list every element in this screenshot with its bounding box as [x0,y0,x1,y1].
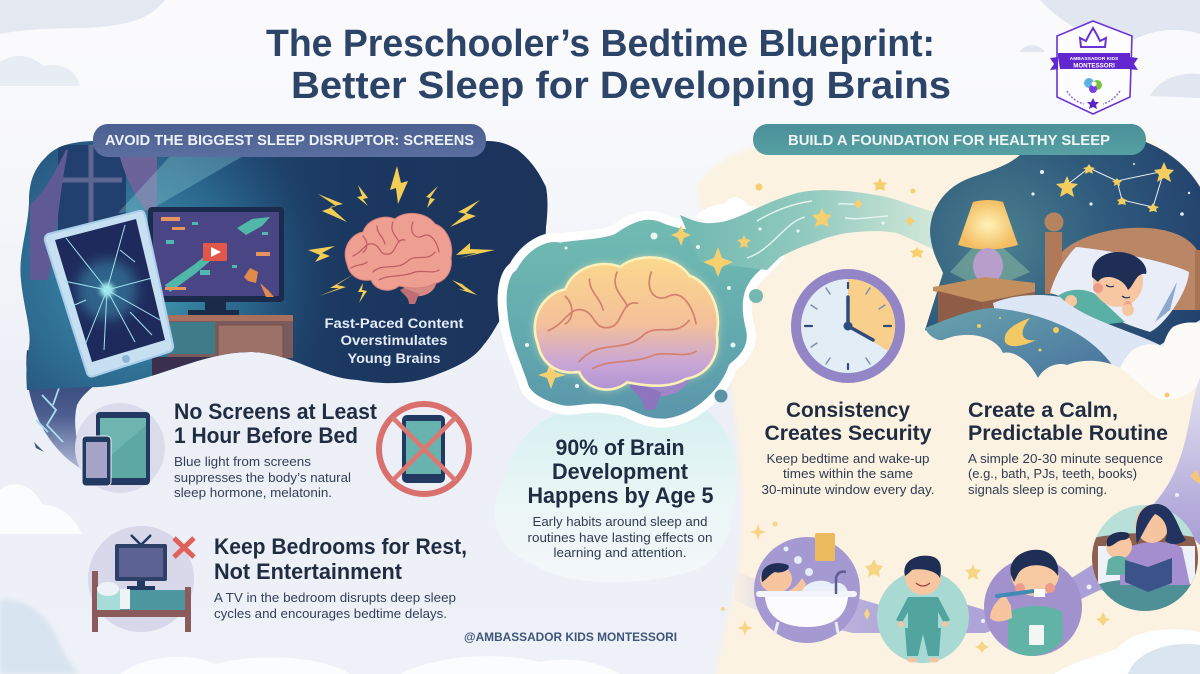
icon: bath [754,533,860,643]
title [266,23,951,107]
routine body: (e.g., bath, PJs, teeth, books) [968,467,1137,481]
screen glow [20,141,303,390]
pale text cloud [495,401,736,582]
icon: bedtime reading [1092,504,1200,615]
stat heading [528,435,714,508]
logo name: MONTESSORI [1073,62,1115,70]
stat heading: Development [552,459,688,484]
routine body [968,452,1163,497]
consistency heading: Consistency [786,398,910,422]
side lavender swirl [1148,378,1200,545]
corner clouds [1054,629,1200,674]
stat heading: 90% of Brain [556,435,684,460]
no screens heading: 1 Hour Before Bed [174,423,358,448]
consistency body: times within the same [783,467,913,481]
block: consistency [762,269,934,497]
white cloud [1120,322,1200,400]
bedroom scene clipped to panel [20,141,303,390]
icon: cracked tablet [45,211,173,377]
bed [925,212,1200,380]
logo name: AMBASSADOR KIDS [1070,56,1119,62]
light beam [118,155,245,213]
logo badge [1050,21,1138,114]
icon: glowing brain [535,257,718,410]
caption: fast-paced content: Fast-Paced Content [324,316,464,331]
decorative stars [721,522,1110,653]
icon: sleeping boy [1058,252,1146,325]
consistency body [762,452,934,497]
window and curtains [30,145,157,280]
bedrooms heading: Keep Bedrooms for Rest, [214,534,467,559]
panel: center brain [495,178,940,582]
no screens heading [174,399,378,448]
icon: overstimulated brain [345,213,452,304]
caption: fast-paced content [324,316,464,366]
icon: pajamas child [877,556,969,663]
bedrooms body: cycles and encourages bedtime delays. [214,607,447,621]
dark panel shape [20,141,548,390]
icon: phone and tablet [75,403,165,493]
attribution handle: @AMBASSADOR KIDS MONTESSORI [464,632,677,644]
desk [152,315,293,376]
heading pill: avoid screens: AVOID THE BIGGEST SLEEP DISRUPTOR: SCREENS [105,133,474,149]
lamp on nightstand [933,200,1035,324]
routine heading: Predictable Routine [968,421,1168,445]
icon: clock [791,269,905,383]
ribbon [1050,53,1138,70]
bedrooms heading [214,534,467,584]
pillow [1050,247,1189,332]
flowing stream [680,190,940,270]
routine strip [721,378,1200,663]
stat body [528,515,713,560]
tail fade with cracks [26,350,100,470]
consistency heading: Creates Security [764,421,932,445]
purple ribbon [735,510,1150,633]
stat heading: Happens by Age 5 [528,483,714,508]
night sky [925,140,1200,370]
stream wisps [747,201,888,258]
blanket with moon [993,295,1200,380]
bedrooms heading: Not Entertainment [214,559,403,584]
block: routine [968,398,1168,497]
panel: cream right background [697,130,1200,674]
logo emblem [1067,78,1120,109]
block: no screens [75,399,469,500]
heading pill: healthy sleep [753,124,1146,155]
clouds under bed [923,322,1200,410]
caption: fast-paced content: Young Brains [348,351,440,366]
panel: screens disruptor [0,130,548,470]
no screens body: sleep hormone, melatonin. [174,486,332,500]
routine heading: Create a Calm, [968,398,1118,422]
consistency heading [764,398,932,445]
heading pill: healthy sleep: BUILD A FOUNDATION FOR HEALTHY SLEEP [788,133,1110,149]
title: Better Sleep for Developing Brains [291,65,951,107]
routine heading [968,398,1168,445]
TV with video [148,207,284,315]
bed and blanket clipped to circle [1092,533,1200,615]
icon: crown [1080,28,1106,47]
caption: fast-paced content: Overstimulates [340,333,448,348]
panel: night bedroom [923,140,1200,410]
no screens heading: No Screens at Least [174,399,378,424]
no screens body: suppresses the body’s natural [174,471,351,485]
heading pill: avoid screens [93,124,486,157]
icon: lightning bolts [308,166,495,303]
white cloud puff [695,197,765,228]
constellation [1031,162,1190,216]
routine body: A simple 20-30 minute sequence [968,452,1163,466]
block: bedrooms [88,526,467,632]
bedrooms body [214,591,456,621]
logo name [1070,56,1119,70]
stat body: routines have lasting effects on [528,531,713,545]
side stars [1164,392,1200,484]
icon: tv over bed [88,526,194,632]
sparkles [525,178,924,402]
no screens body: Blue light from screens [174,455,311,469]
icon: brushing teeth [984,550,1082,656]
no screens body [174,455,351,500]
stat body: learning and attention. [554,546,686,560]
ribbon dots [981,493,1179,623]
consistency body: 30-minute window every day. [762,483,934,497]
consistency body: Keep bedtime and wake-up [766,452,930,466]
bedrooms body: A TV in the bedroom disrupts deep sleep [214,591,456,605]
icon: prohibited phone [379,404,469,494]
title: The Preschooler’s Bedtime Blueprint: [266,23,935,65]
routine body: signals sleep is coming. [968,483,1107,497]
stat body: Early habits around sleep and [532,515,708,529]
teal blob with white halo [502,215,780,423]
